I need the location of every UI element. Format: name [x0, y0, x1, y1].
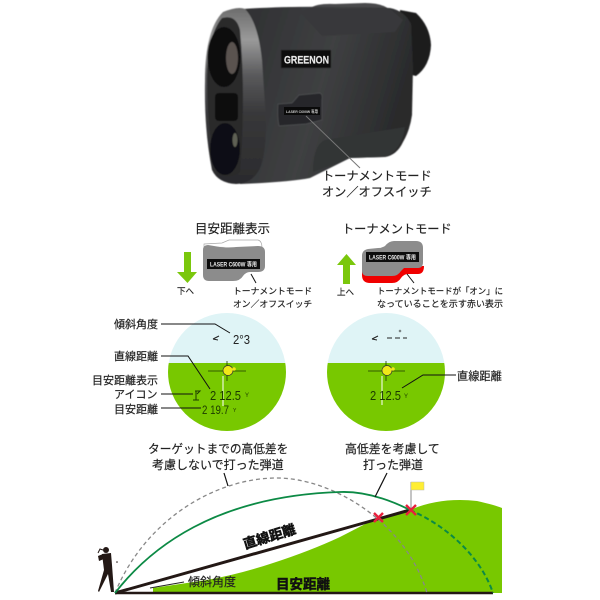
switch label strip: LASER C600W 専用 — [286, 108, 318, 114]
label: angle: 傾斜角度 — [188, 574, 236, 589]
switch caption: トーナメントモード — [322, 169, 432, 183]
unadjusted trajectory — [115, 478, 427, 593]
main body — [240, 7, 413, 184]
arrow: down — [177, 252, 197, 283]
reference icon — [193, 391, 200, 400]
panel: left viewfinder — [168, 313, 286, 431]
reticle — [368, 361, 405, 405]
front face dark — [207, 17, 243, 177]
leader: right viewfinder — [402, 375, 456, 388]
straight line — [115, 510, 410, 593]
eyepiece — [400, 10, 431, 76]
switch icon: down position: LASER C600W 専用 — [210, 260, 257, 268]
adjusted trajectory solid — [115, 492, 410, 593]
label: reference distance: 目安距離 — [276, 576, 330, 592]
labels: left viewfinder — [92, 318, 158, 416]
straight distance readout: 2 12.5 — [210, 388, 241, 403]
labels: left viewfinder: 直線距離 — [114, 349, 158, 363]
flag — [411, 482, 424, 510]
label: straight distance: 直線距離 — [241, 521, 298, 552]
labels: left viewfinder: 傾斜角度 — [114, 318, 158, 331]
hill — [153, 500, 502, 593]
ground line — [115, 592, 493, 594]
unit Y: Y — [404, 394, 408, 400]
top panel — [300, 8, 403, 36]
switch icon: up position — [362, 241, 424, 283]
switch caption: オン／オフスイッチ — [322, 185, 432, 199]
straight distance readout: 2 12.5 — [370, 388, 401, 403]
switch caption — [322, 169, 432, 199]
GREENON logo text: GREENON — [284, 54, 329, 66]
caption: red indicator: なっていることを示す赤い表示 — [377, 299, 503, 309]
labels: left viewfinder: 目安距離表示 — [92, 373, 158, 387]
labels: left viewfinder: アイコン — [114, 389, 157, 401]
reticle — [208, 361, 246, 406]
switch icon: up position: LASER C600W 専用 — [369, 254, 416, 262]
front shell — [205, 8, 266, 184]
rangefinder device photo — [205, 3, 431, 184]
arrow: up — [337, 254, 356, 284]
centre window — [215, 93, 238, 121]
labels: left viewfinder: 目安距離 — [114, 402, 158, 416]
text: up: 上へ — [337, 287, 355, 297]
heading: distance display: 目安距離表示 — [195, 222, 270, 236]
caption: unadjusted: 考慮しないで打った弾道 — [152, 458, 284, 472]
switch housing — [278, 93, 322, 126]
leader: adjusted — [375, 473, 387, 497]
leader line: switch — [306, 116, 360, 168]
switch label strip — [284, 107, 320, 115]
caption: adjusted — [345, 442, 440, 472]
caption: adjusted: 打った弾道 — [363, 458, 423, 472]
red markers — [374, 505, 416, 522]
caption: unadjusted — [148, 442, 288, 472]
text: down: 下へ — [177, 286, 195, 296]
GREENON badge — [281, 50, 331, 68]
caption: red indicator: トーナメントモードが「オン」に — [377, 286, 503, 296]
caption: adjusted: 高低差を考慮して — [345, 442, 440, 456]
unit Y: Y — [245, 393, 249, 399]
caption: left switch — [233, 286, 312, 309]
caption: unadjusted: ターゲットまでの高低差を — [148, 442, 288, 456]
reference distance readout: 2 19.7 — [202, 403, 229, 417]
trajectory diagram — [98, 442, 502, 593]
panel: right viewfinder — [327, 313, 445, 431]
switch icon: down position — [203, 240, 265, 281]
top buttons — [310, 3, 392, 17]
leader: right switch — [407, 274, 414, 283]
angle readout: 2°3 — [233, 332, 250, 347]
caption: left switch: オン／オフスイッチ — [233, 299, 312, 309]
caption: red indicator — [377, 286, 503, 309]
leader: unadjusted — [224, 473, 228, 486]
top lens — [208, 27, 240, 87]
adjusted trajectory dashed — [410, 510, 493, 593]
heading: tournament mode: トーナメントモード — [342, 222, 452, 236]
unit Y small: Y — [233, 408, 237, 414]
label: straight distance: 直線距離 — [457, 369, 502, 383]
leader: left switch — [251, 274, 256, 283]
caption: left switch: トーナメントモード — [233, 286, 312, 296]
bottom lens — [210, 123, 240, 175]
lower panel — [313, 127, 405, 172]
icon: golfer — [98, 547, 118, 592]
angle placeholder — [372, 330, 407, 340]
leader: angle — [150, 582, 184, 588]
leaders: left viewfinder — [161, 324, 230, 408]
